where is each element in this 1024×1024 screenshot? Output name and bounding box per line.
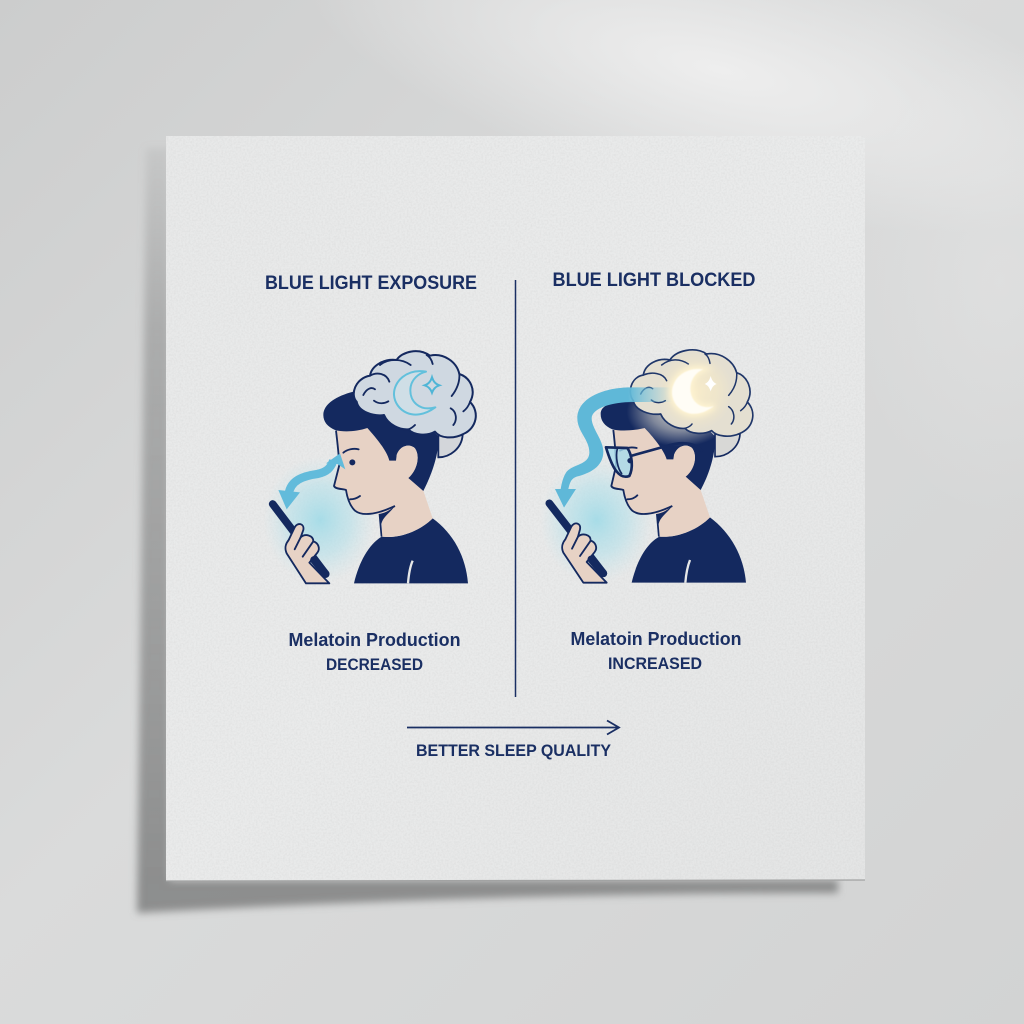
warm glow over hair bbox=[628, 402, 714, 446]
eye and mouth bbox=[349, 459, 355, 465]
left caption bbox=[288, 630, 460, 674]
screen glow bbox=[263, 457, 377, 583]
hand bbox=[285, 524, 329, 583]
paper sheet bbox=[166, 136, 865, 881]
right caption: Melatoin Production bbox=[570, 629, 742, 649]
brain stem bbox=[715, 434, 740, 457]
hand bbox=[562, 523, 607, 583]
heading: blue light exposure: BLUE LIGHT EXPOSURE bbox=[265, 273, 477, 294]
phone bbox=[549, 503, 603, 573]
brain stem bbox=[438, 435, 463, 457]
ear bbox=[674, 446, 695, 477]
center divider bbox=[514, 280, 516, 697]
blue light arrow deflected bbox=[555, 387, 672, 508]
neck and face bbox=[334, 423, 433, 537]
moon outline and star bbox=[394, 371, 435, 415]
paper shadow bbox=[137, 148, 838, 913]
right caption: INCREASED bbox=[608, 654, 702, 673]
blue light arrow bbox=[289, 461, 333, 494]
glowing moon and star bbox=[672, 369, 714, 414]
arrow: progress to better sleep bbox=[407, 720, 619, 734]
glasses bbox=[606, 443, 703, 477]
footer label: BETTER SLEEP QUALITY bbox=[416, 741, 612, 760]
brain bbox=[354, 351, 476, 437]
jaw shadow and neck line bbox=[656, 506, 672, 537]
screen glow bbox=[540, 457, 653, 583]
shirt bbox=[632, 517, 746, 583]
brain bbox=[630, 350, 753, 436]
illustration: person exposed to blue light bbox=[263, 351, 476, 583]
right caption bbox=[570, 629, 742, 673]
heading: blue light blocked: BLUE LIGHT BLOCKED bbox=[552, 270, 756, 291]
hair bbox=[601, 397, 715, 490]
left caption: Melatoin Production bbox=[288, 630, 460, 650]
warm brain glow bbox=[657, 353, 733, 430]
ear bbox=[397, 446, 418, 478]
jaw shadow and neck line bbox=[379, 506, 395, 537]
neck and face bbox=[611, 423, 710, 537]
phone bbox=[273, 504, 326, 574]
shirt bbox=[354, 518, 468, 583]
left caption: DECREASED bbox=[326, 655, 423, 674]
illustration: person with blue light blocking glasses bbox=[540, 350, 753, 583]
eye, eyebrow and mouth bbox=[620, 447, 637, 499]
hair bbox=[323, 392, 439, 491]
